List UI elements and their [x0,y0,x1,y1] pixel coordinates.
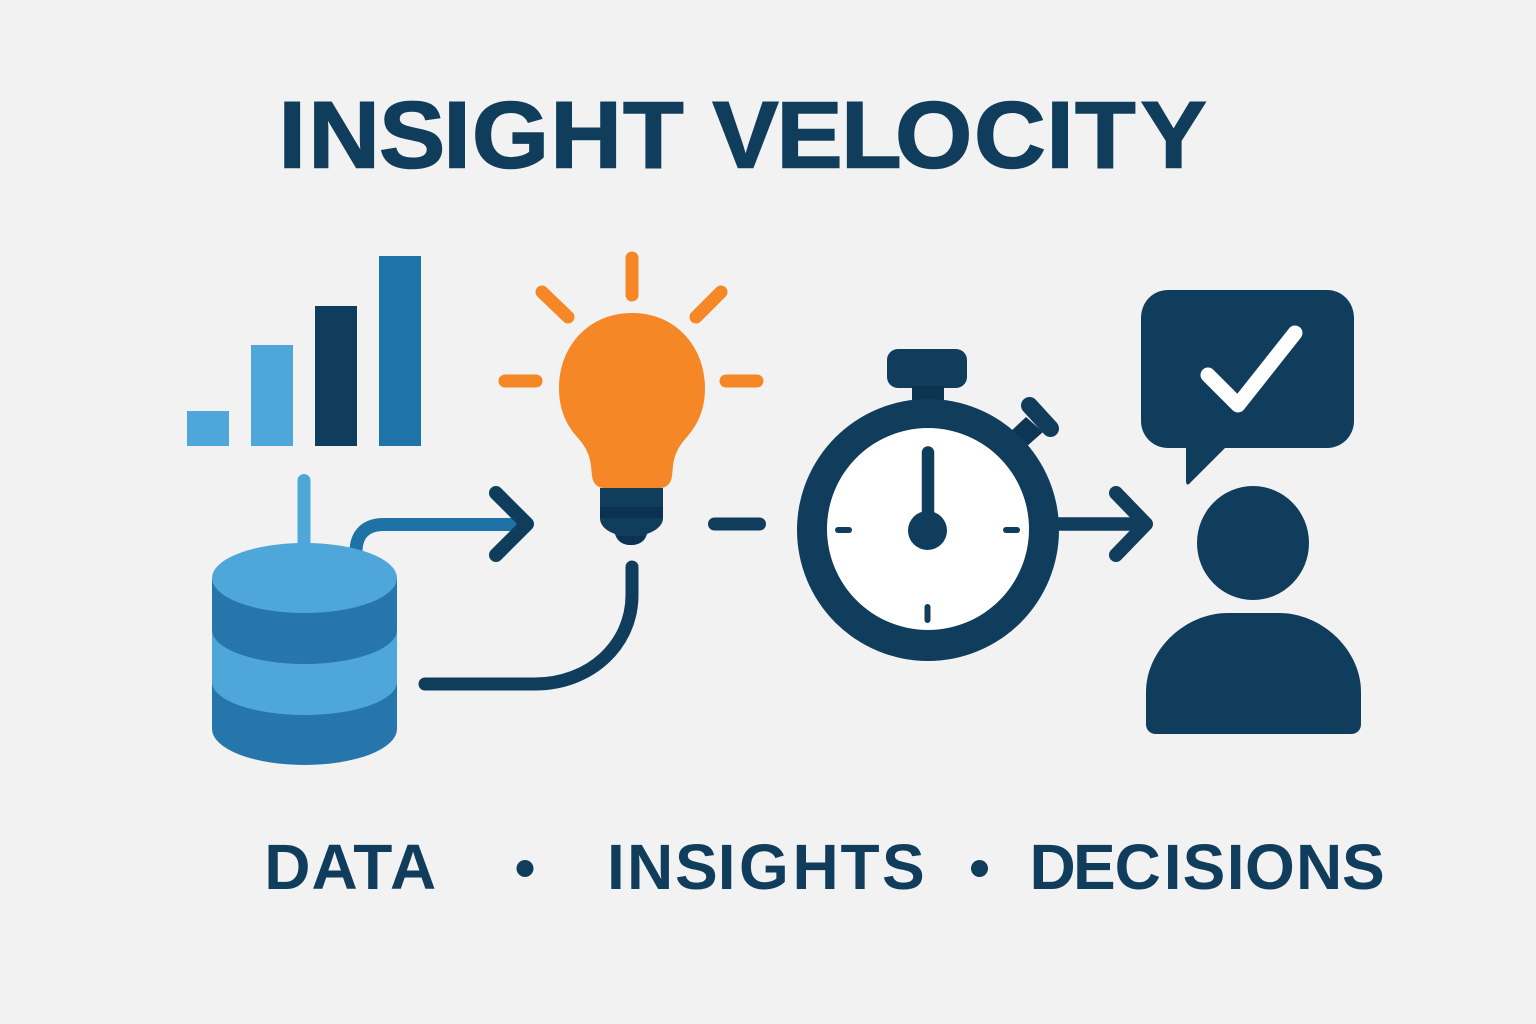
arrow: database to bulb (lower) [425,567,632,684]
bulb cap shade [617,536,645,545]
arrow: stopwatch to person [1050,493,1146,555]
bulb glass [559,313,705,488]
connector dash [714,518,760,530]
bulb rays [505,258,757,381]
icon: database [212,480,397,765]
separator dot [971,860,988,877]
icon: person [1146,486,1361,734]
title: INSIGHT VELOCITY [278,82,1207,188]
bulb base band [600,507,663,518]
icon: speech bubble with check [1141,290,1354,485]
label: data: DATA [264,831,436,903]
label: insights: INSIGHTS [607,831,925,903]
icon: light bulb [505,258,757,545]
arrow: database to bulb (upper) [356,493,527,555]
label: decisions: DECISIONS [1030,831,1385,903]
separator dot [516,860,534,877]
icon: bar chart [187,256,421,446]
bulb base [600,488,663,545]
icon: stopwatch [797,349,1059,661]
